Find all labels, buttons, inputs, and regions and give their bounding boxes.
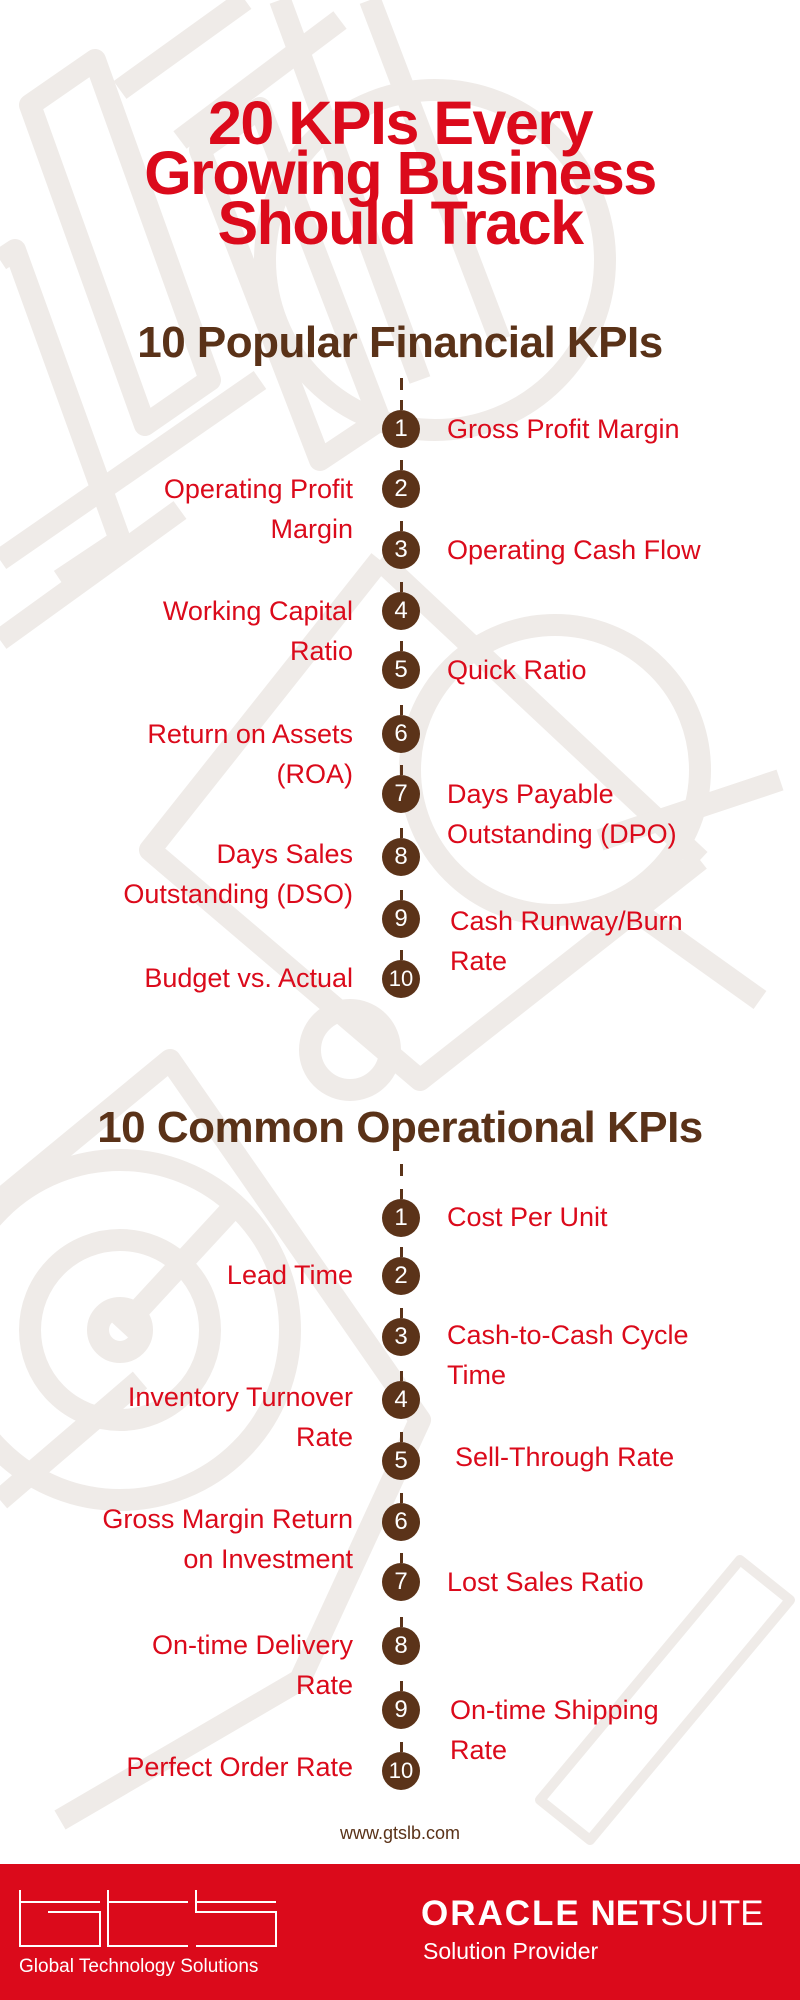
timeline: financial (400, 378, 403, 390)
text: Lost Sales Ratio (447, 1567, 644, 1597)
text: Inventory Turnover (128, 1382, 353, 1412)
text: solution provider: Solution Provider (423, 1938, 598, 1964)
title: Growing Business (144, 139, 656, 207)
op kpi 3: 3 (394, 1323, 408, 1350)
op kpi 4 (382, 1381, 420, 1419)
op kpi 6: 6 (394, 1508, 408, 1535)
op kpi 2 (382, 1257, 420, 1295)
kpi 8: 8 (394, 843, 408, 870)
heading: operational: 10 Common Operational KPIs (97, 1103, 703, 1152)
kpi 4: 4 (394, 597, 408, 624)
op kpi 1 (382, 1199, 420, 1237)
op kpi 8 (382, 1627, 420, 1665)
kpi 6: 6 (394, 720, 408, 747)
text: Time (447, 1360, 506, 1390)
kpi 10: 10 (389, 966, 413, 991)
text: Working Capital (163, 596, 353, 626)
op kpi 7: 7 (394, 1568, 408, 1595)
text: Gross Margin Return (102, 1504, 353, 1534)
kpi 1 (382, 410, 420, 448)
text: Cost Per Unit (447, 1202, 608, 1232)
text: Perfect Order Rate (126, 1752, 353, 1782)
kpi 3 (382, 531, 420, 569)
kpi 9: 9 (394, 905, 408, 932)
op kpi 1: 1 (394, 1204, 408, 1231)
kpi 5 (382, 651, 420, 689)
kpi 6 (382, 715, 420, 753)
footer (0, 1864, 800, 2000)
title (144, 89, 656, 257)
heading: financial: 10 Popular Financial KPIs (137, 318, 663, 367)
text: Margin (270, 514, 353, 544)
kpi 4 (382, 592, 420, 630)
op kpi 10 (382, 1752, 420, 1790)
op kpi 6 (382, 1503, 420, 1541)
text: Operating Cash Flow (447, 535, 701, 565)
op kpi 9: 9 (394, 1696, 408, 1723)
text: Return on Assets (147, 719, 353, 749)
kpi 5: 5 (394, 656, 408, 683)
text: Sell-Through Rate (455, 1442, 674, 1472)
text: On-time Shipping (450, 1695, 659, 1725)
text: Days Payable (447, 779, 614, 809)
text: Rate (296, 1670, 353, 1700)
text: Quick Ratio (447, 655, 587, 685)
op kpi 9 (382, 1691, 420, 1729)
title: 20 KPIs Every (208, 89, 592, 157)
text: (ROA) (276, 759, 353, 789)
text: Operating Profit (164, 474, 353, 504)
text: Cash Runway/Burn (450, 906, 683, 936)
kpi 3: 3 (394, 536, 408, 563)
text: Cash-to-Cash Cycle (447, 1320, 689, 1350)
op kpi 5: 5 (394, 1447, 408, 1474)
logo: gts (19, 1890, 277, 1947)
timeline: operational (400, 1164, 403, 1176)
text: Rate (296, 1422, 353, 1452)
text: Budget vs. Actual (144, 963, 353, 993)
kpi 9 (382, 900, 420, 938)
text: Rate (450, 946, 507, 976)
op kpi 4: 4 (394, 1386, 408, 1413)
kpi 8 (382, 838, 420, 876)
op kpi 7 (382, 1563, 420, 1601)
text: Ratio (290, 636, 353, 666)
title: Should Track (217, 189, 583, 257)
op kpi 2: 2 (394, 1262, 408, 1289)
kpi 7: 7 (394, 780, 408, 807)
text: Rate (450, 1735, 507, 1765)
text: Lead Time (227, 1260, 353, 1290)
kpi 7 (382, 775, 420, 813)
kpi 1: 1 (394, 415, 408, 442)
kpi 2 (382, 470, 420, 508)
text: Outstanding (DSO) (123, 879, 353, 909)
op kpi 5 (382, 1442, 420, 1480)
kpi 10 (382, 960, 420, 998)
text: on Investment (183, 1544, 353, 1574)
website url: www.gtslb.com (340, 1823, 460, 1843)
logo: oracle netsuite: ORACLE NETSUITE (421, 1894, 764, 1933)
text: Gross Profit Margin (447, 414, 680, 444)
kpi 2: 2 (394, 475, 408, 502)
text: Outstanding (DPO) (447, 819, 677, 849)
op kpi 3 (382, 1318, 420, 1356)
text: On-time Delivery (152, 1630, 353, 1660)
op kpi 8: 8 (394, 1632, 408, 1659)
text: global technology solutions: Global Technology Solutions (19, 1956, 258, 1977)
op kpi 10: 10 (389, 1758, 413, 1783)
text: Days Sales (216, 839, 353, 869)
